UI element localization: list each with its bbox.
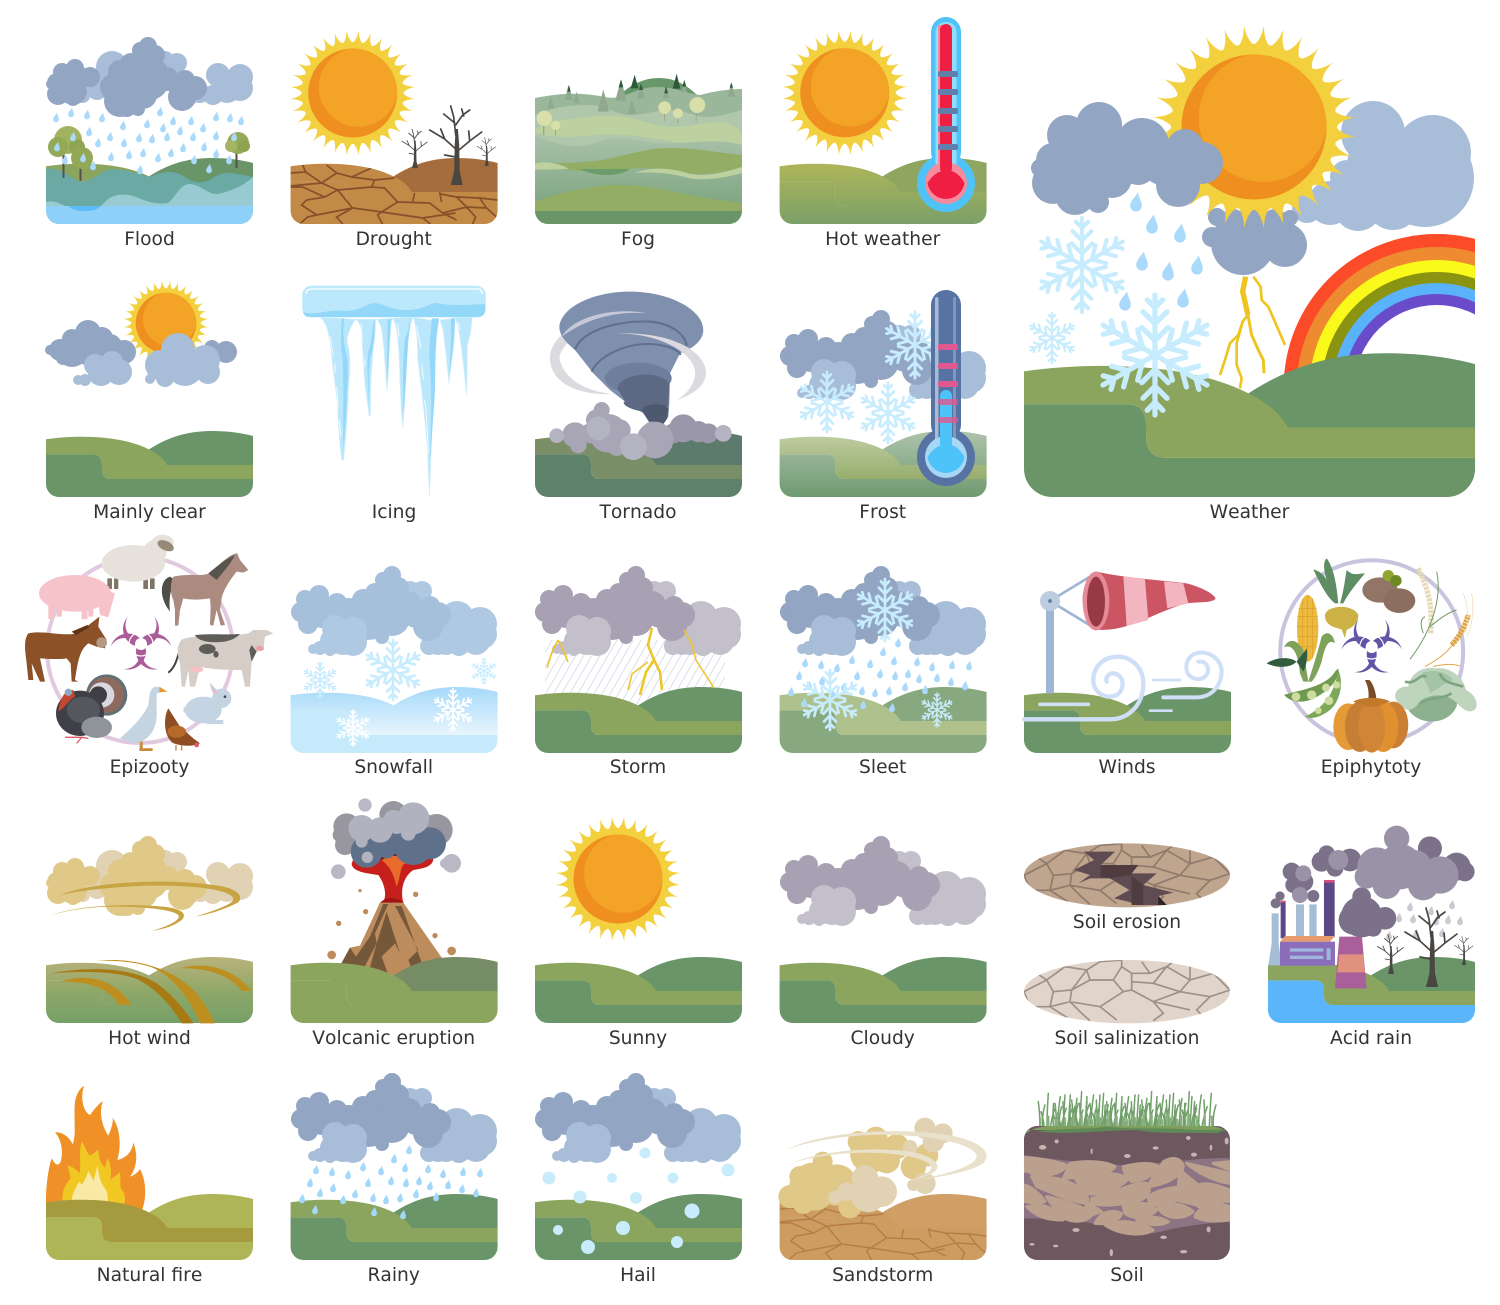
panel: Weather xyxy=(1024,26,1476,518)
slanted rain xyxy=(545,640,725,706)
funnel xyxy=(550,292,706,428)
cloud xyxy=(780,566,986,656)
panel: Winds xyxy=(1024,572,1231,778)
panel: Soil erosion xyxy=(1024,843,1230,933)
sun xyxy=(539,800,697,958)
panel: Sandstorm xyxy=(778,1118,987,1286)
ground xyxy=(535,1194,742,1260)
label: Tornado xyxy=(598,502,676,523)
dust xyxy=(549,402,732,460)
snowflakes xyxy=(801,579,954,730)
ground xyxy=(291,687,498,753)
panel: Cloudy xyxy=(780,836,987,1049)
biohazard symbol xyxy=(108,616,174,673)
upper dark cloud xyxy=(1031,102,1223,215)
label: Hot weather xyxy=(825,229,941,250)
trees xyxy=(48,126,250,181)
cracked soil with chasm xyxy=(1024,843,1230,907)
snowflakes xyxy=(798,312,947,443)
ground xyxy=(46,957,253,1023)
panel: Drought xyxy=(290,31,498,249)
label: Hail xyxy=(620,1265,656,1286)
potatoes xyxy=(1362,570,1415,613)
cloud xyxy=(46,836,253,916)
crops xyxy=(1267,558,1477,753)
air wind streaks xyxy=(52,882,240,931)
light cloud xyxy=(1292,101,1474,231)
label: Sunny xyxy=(609,1028,667,1049)
panel: Fog xyxy=(535,74,742,250)
fog trees xyxy=(537,74,735,136)
icicle shading xyxy=(330,318,460,460)
ground xyxy=(780,1194,987,1260)
cloud xyxy=(780,836,986,926)
windsock xyxy=(1040,572,1216,693)
sun xyxy=(765,13,924,172)
label: Frost xyxy=(859,502,906,523)
factory xyxy=(1268,880,1367,988)
ground xyxy=(780,158,987,224)
label: Winds xyxy=(1098,757,1156,778)
raindrops xyxy=(1119,192,1203,311)
raindrops xyxy=(53,107,244,174)
peas xyxy=(1284,668,1341,718)
label: Mainly clear xyxy=(93,502,206,523)
ground xyxy=(291,1194,498,1260)
cloud xyxy=(535,1073,741,1163)
panel: Hail xyxy=(535,1073,742,1286)
ice bar xyxy=(302,286,486,317)
panel: Hot weather xyxy=(765,13,987,250)
biohazard symbol xyxy=(1339,620,1405,676)
label: Sandstorm xyxy=(832,1265,933,1286)
lower dark cloud xyxy=(1202,208,1307,275)
land and water xyxy=(46,158,253,224)
ground xyxy=(1024,687,1231,753)
label: Epiphytoty xyxy=(1321,757,1421,778)
ground xyxy=(46,431,253,497)
donkey xyxy=(25,617,107,682)
sun xyxy=(112,269,220,377)
sheep xyxy=(102,535,175,589)
ground wind streaks xyxy=(52,960,252,1023)
raindrops xyxy=(299,1145,483,1219)
panel: Snowfall xyxy=(291,566,498,778)
snowflakes xyxy=(1028,218,1214,415)
label: Drought xyxy=(356,229,432,250)
ring xyxy=(47,557,233,743)
grass xyxy=(1038,1092,1216,1130)
panel: Storm xyxy=(535,566,742,778)
label: Snowfall xyxy=(354,757,433,778)
panel: Natural fire xyxy=(46,1086,253,1286)
rainbow xyxy=(1284,234,1475,374)
dead trees xyxy=(402,106,496,185)
raindrops xyxy=(788,638,972,712)
rabbit xyxy=(183,683,231,724)
cow xyxy=(168,630,273,687)
label: Volcanic eruption xyxy=(312,1028,475,1049)
horse xyxy=(162,553,248,626)
wind swirls xyxy=(1024,653,1222,719)
ground xyxy=(535,957,742,1023)
turnip xyxy=(1313,558,1365,638)
cloud xyxy=(780,310,986,400)
light clouds xyxy=(73,333,220,387)
goose xyxy=(120,687,167,751)
ground xyxy=(780,957,987,1023)
ground and water xyxy=(1268,957,1475,1023)
label: Hot wind xyxy=(108,1028,191,1049)
hailstones xyxy=(542,1148,734,1254)
ground xyxy=(535,431,742,497)
panel: Volcanic eruption xyxy=(291,798,498,1049)
panel: Hot wind xyxy=(46,836,253,1049)
label: Fog xyxy=(621,229,655,250)
ground xyxy=(535,687,742,753)
panel: Flood xyxy=(46,37,253,250)
panel: Epizooty xyxy=(25,535,273,778)
salty soil xyxy=(1024,960,1230,1023)
misty hills xyxy=(535,78,742,224)
sun xyxy=(1125,0,1383,256)
label: Icing xyxy=(372,502,416,523)
label: Storm xyxy=(610,757,666,778)
cracked ground xyxy=(291,158,498,224)
corn xyxy=(1267,595,1335,682)
hen xyxy=(165,708,200,751)
panel: Rainy xyxy=(291,1073,498,1286)
panel: Icing xyxy=(302,286,486,523)
label: Acid rain xyxy=(1330,1028,1412,1049)
pumpkin xyxy=(1333,680,1408,753)
rice and wheat xyxy=(1410,568,1473,667)
ground xyxy=(780,687,987,753)
panel: Soil salinization xyxy=(1024,960,1230,1049)
ground xyxy=(291,957,498,1023)
panel: Soil xyxy=(1024,1092,1230,1286)
label: Sleet xyxy=(859,757,906,778)
label: Natural fire xyxy=(97,1265,202,1286)
panel: Sleet xyxy=(780,566,987,778)
sun xyxy=(273,14,432,172)
label: Soil erosion xyxy=(1073,912,1181,933)
flames xyxy=(46,1086,145,1212)
panel: Frost xyxy=(780,290,987,523)
thermometer xyxy=(917,290,975,486)
lightning xyxy=(547,628,714,695)
cloud xyxy=(291,1073,497,1163)
smoke cloud xyxy=(1271,826,1475,937)
turkey xyxy=(56,674,127,743)
label: Soil salinization xyxy=(1054,1028,1200,1049)
label: Soil xyxy=(1110,1265,1144,1286)
label: Cloudy xyxy=(851,1028,915,1049)
soil layers xyxy=(1024,1125,1230,1260)
ground xyxy=(780,431,987,497)
panel: Mainly clear xyxy=(45,269,253,523)
lightning xyxy=(1220,277,1285,388)
panel: Tornado xyxy=(535,292,742,523)
cabbage xyxy=(1395,668,1477,722)
cloud xyxy=(535,566,741,656)
acid raindrops xyxy=(1386,900,1463,940)
dust clouds xyxy=(778,1118,987,1218)
thermometer xyxy=(917,17,975,212)
smoke xyxy=(331,798,461,879)
lava xyxy=(352,851,433,903)
volcano xyxy=(327,889,456,993)
panel: Sunny xyxy=(535,800,742,1049)
flood cloud xyxy=(46,37,253,117)
ground xyxy=(46,1194,253,1260)
animals xyxy=(25,535,273,751)
label: Epizooty xyxy=(110,757,189,778)
label: Flood xyxy=(124,229,175,250)
dead trees xyxy=(1378,908,1473,987)
pig xyxy=(39,575,115,619)
ground xyxy=(1024,353,1475,497)
panel: Epiphytoty xyxy=(1267,558,1477,778)
panel: Acid rain xyxy=(1268,826,1475,1049)
label: Rainy xyxy=(367,1265,420,1286)
icicles xyxy=(320,317,472,497)
cloud xyxy=(291,566,497,656)
snowflakes xyxy=(302,640,497,746)
label: Weather xyxy=(1210,502,1290,523)
dark cloud xyxy=(45,320,237,367)
ring xyxy=(1280,560,1463,743)
